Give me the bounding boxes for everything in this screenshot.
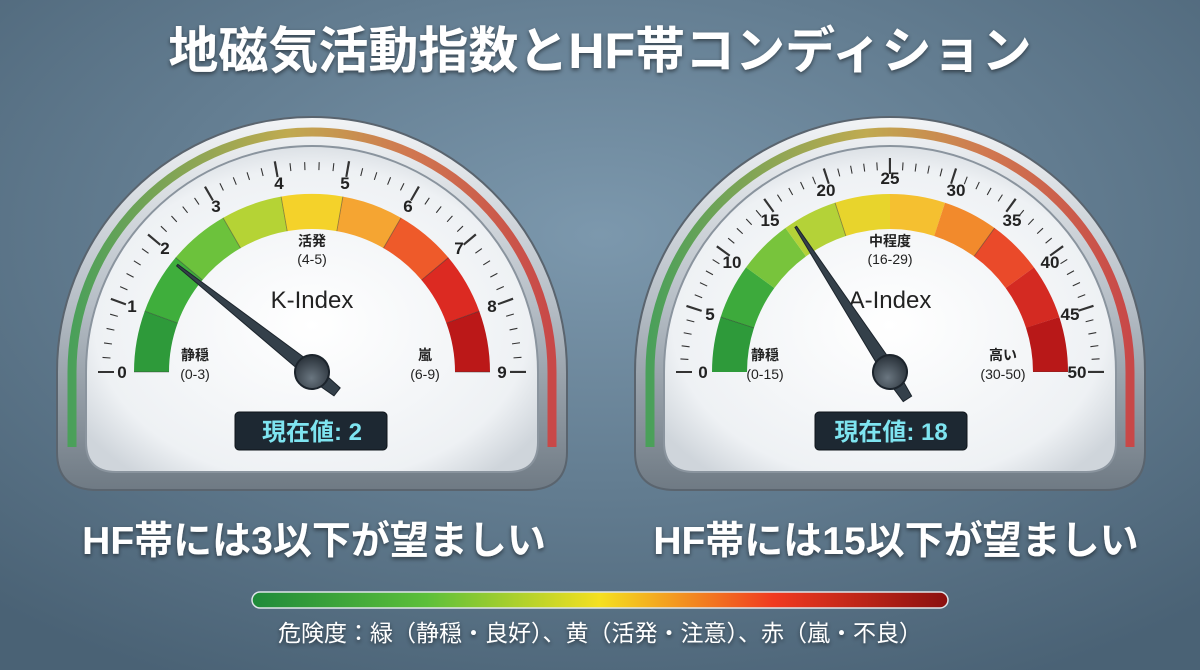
scale numbers: 3: [211, 197, 221, 216]
colored band: [134, 194, 490, 372]
scale numbers: 2: [160, 239, 170, 258]
colored band: [712, 194, 1068, 372]
zone labels: (0-3): [180, 366, 210, 382]
zone labels: (6-9): [410, 366, 440, 382]
zone labels: 中程度: [869, 233, 911, 249]
value display: 現在値: 18: [834, 419, 948, 446]
zone labels: 高い: [989, 347, 1017, 363]
gauge housing: [635, 117, 1145, 490]
scale numbers: 20: [817, 181, 835, 200]
title: 地磁気活動指数とHF帯コンディション: [168, 23, 1032, 79]
zone labels: (30-50): [980, 366, 1026, 382]
zone labels: 静穏: [751, 347, 779, 363]
value display: [815, 412, 967, 450]
scale numbers: 35: [1003, 211, 1021, 230]
scale numbers: 0: [117, 363, 127, 382]
zone labels: 嵐: [418, 347, 432, 363]
zone labels: 活発: [298, 233, 326, 249]
needle: [167, 252, 348, 405]
scale numbers: [698, 169, 1086, 382]
gauge name: K-Index: [271, 287, 353, 314]
needle: [782, 218, 922, 408]
caption: K-index: HF帯には3以下が望ましい: [82, 520, 546, 563]
tick marks: [98, 161, 526, 373]
value display: [235, 412, 387, 450]
gauge name: A-Index: [849, 287, 931, 314]
panel: K-index gauge: [56, 116, 568, 491]
scale numbers: 30: [947, 181, 965, 200]
scale numbers: 45: [1061, 305, 1079, 324]
scale numbers: 1: [127, 297, 137, 316]
scale numbers: 25: [881, 169, 899, 188]
zone labels: (4-5): [297, 251, 327, 267]
scale numbers: 6: [403, 197, 413, 216]
scale numbers: 10: [723, 253, 741, 272]
scale numbers: 9: [497, 363, 507, 382]
caption: A-index: HF帯には15以下が望ましい: [653, 520, 1139, 563]
value display: 現在値: 2: [262, 419, 362, 446]
zone labels: (0-15): [746, 366, 784, 382]
gauge housing: [57, 117, 567, 490]
zone labels: (16-29): [867, 251, 913, 267]
scale numbers: 15: [761, 211, 779, 230]
scale numbers: 8: [487, 297, 497, 316]
zone labels: [180, 233, 440, 382]
scale numbers: [117, 174, 507, 382]
tick marks: [676, 158, 1104, 373]
scale numbers: 7: [454, 239, 464, 258]
scale numbers: 4: [274, 174, 284, 193]
scale numbers: 50: [1068, 363, 1086, 382]
scale numbers: 5: [340, 174, 350, 193]
zone labels: [746, 233, 1026, 382]
scale numbers: 0: [698, 363, 708, 382]
scale numbers: 5: [705, 305, 715, 324]
scale numbers: 40: [1041, 253, 1059, 272]
legend bar: [252, 592, 948, 608]
legend text: 危険度：緑（静穏・良好）、黄（活発・注意）、赤（嵐・不良）: [278, 620, 922, 646]
zone labels: 静穏: [181, 347, 209, 363]
panel: A-index gauge: [634, 116, 1146, 491]
